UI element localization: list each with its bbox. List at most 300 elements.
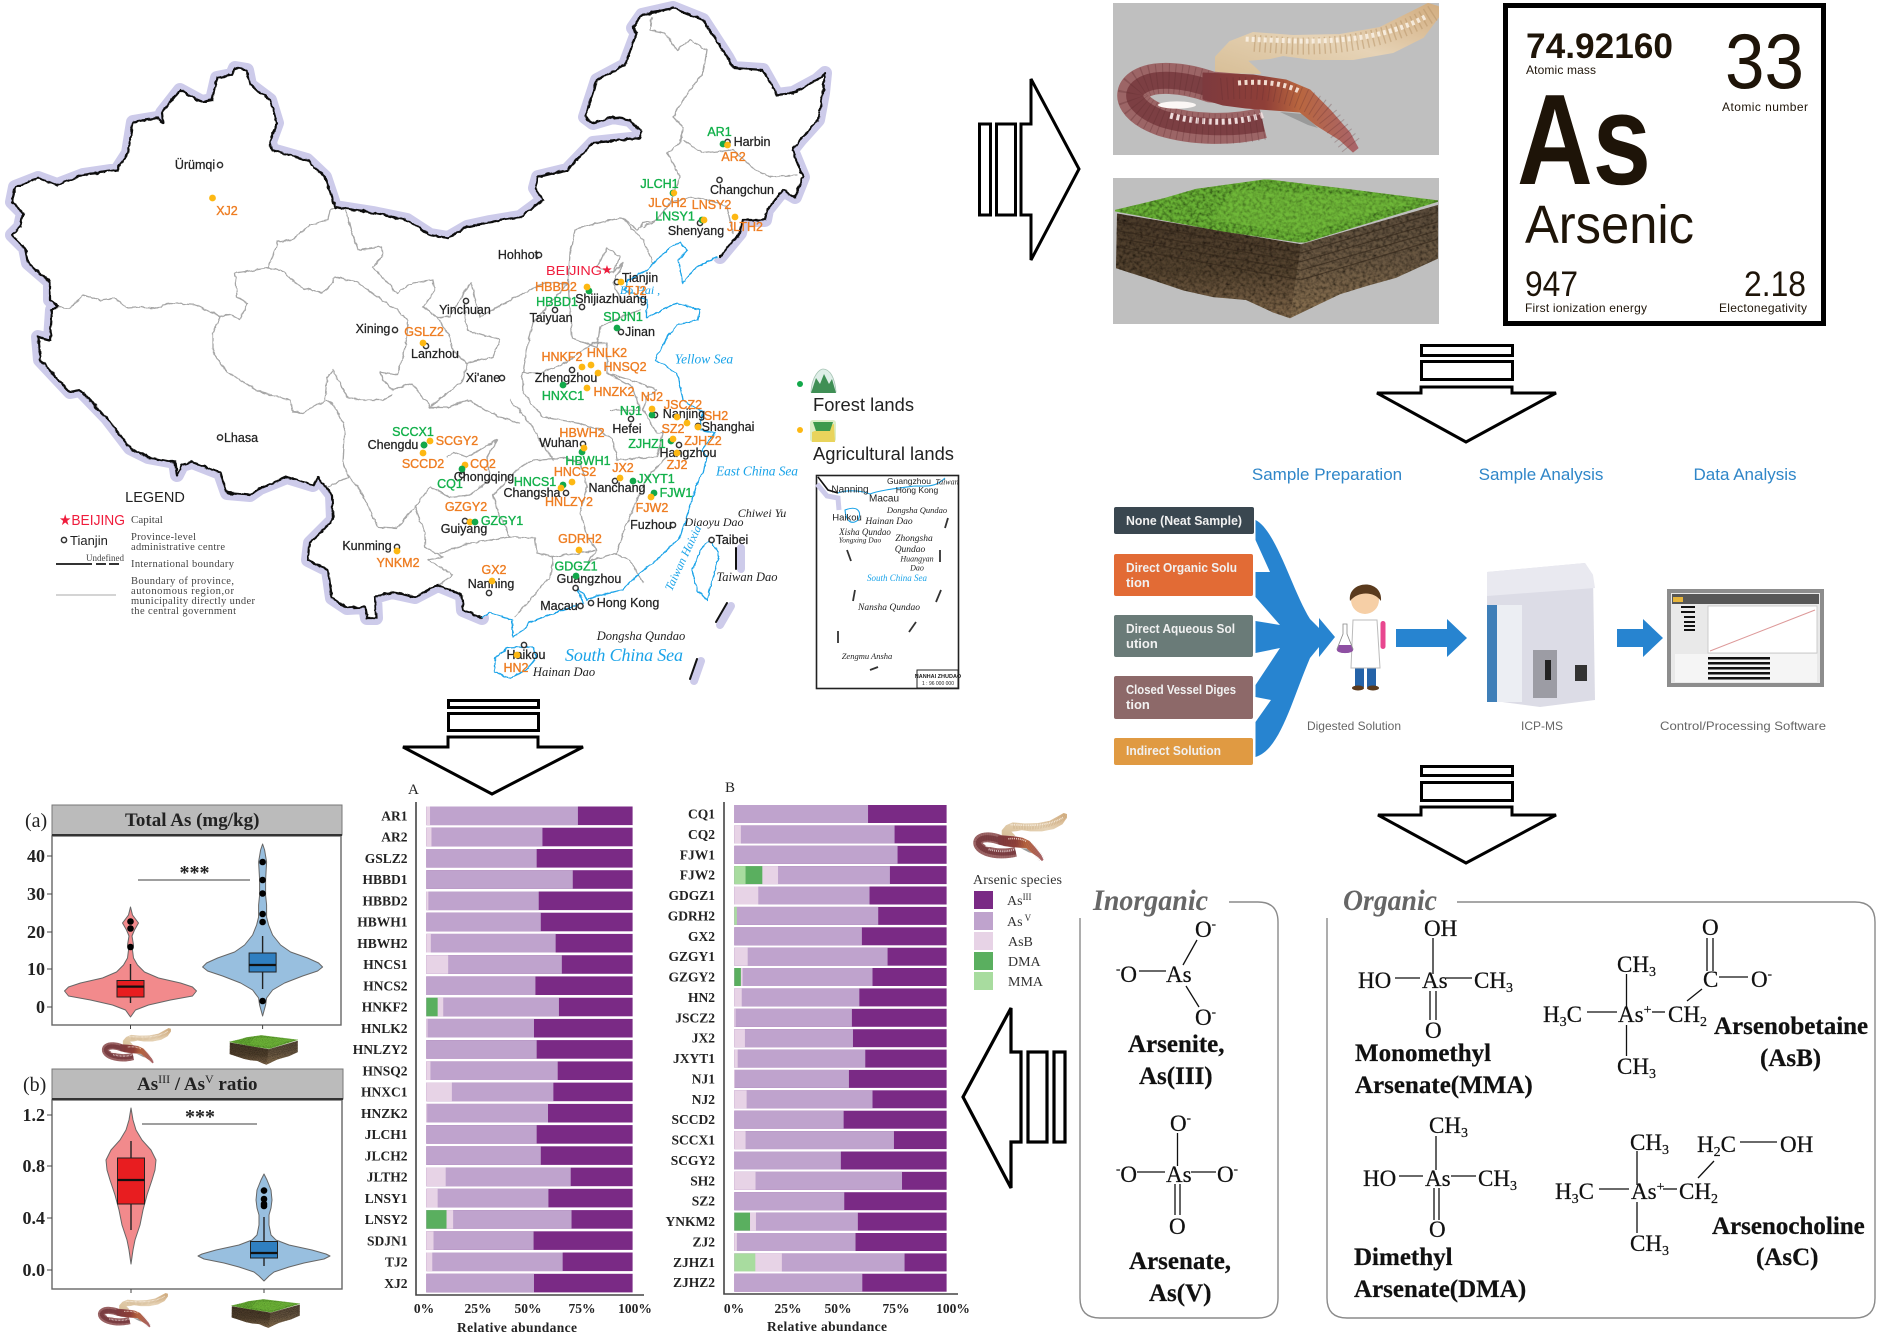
axis labels A — [414, 1301, 652, 1335]
forest lands key: Forest lands — [813, 395, 914, 415]
structure: arsenocholine: 3 — [1662, 1244, 1669, 1259]
sampling site codes: GZGY2 — [445, 500, 487, 514]
structure: arsenocholine: C — [1579, 1179, 1594, 1204]
structure: monomethyl arsenate: Monomethyl — [1355, 1040, 1491, 1067]
axes A — [416, 802, 644, 1295]
structure: arsenocholine: CH — [1679, 1179, 1711, 1204]
inset map of South China Sea: Dao — [909, 564, 924, 572]
structure: arsenobetaine: CH — [1617, 1054, 1649, 1079]
sampling site codes: HNKF2 — [542, 350, 583, 364]
arsenic periodic table card: Electonegativity — [1719, 301, 1807, 315]
row labels B: GZGY1 — [668, 949, 715, 964]
nine-dash line segments — [690, 548, 741, 681]
land type key — [797, 369, 954, 464]
row labels B: ZJHZ1 — [673, 1255, 715, 1270]
violin plot (a): total As: 0 — [36, 997, 45, 1017]
axis labels B — [724, 1301, 970, 1334]
structure: arsenobetaine — [1543, 915, 1868, 1082]
city names: Ürümqi — [175, 158, 215, 172]
city names: BEIJING — [546, 264, 602, 278]
workflow captions: ICP-MS — [1521, 719, 1563, 733]
arsenic periodic table card: Arsenic — [1525, 195, 1694, 255]
structure: dimethyl arsenate: CH — [1478, 1166, 1510, 1191]
soil violin — [198, 1174, 330, 1281]
sampling site codes: YNKM2 — [376, 556, 420, 570]
structure: arsenocholine: As — [1631, 1179, 1657, 1204]
map legend: the central government — [131, 606, 236, 617]
sampling site codes: HN2 — [503, 661, 529, 675]
method: direct organic solution: Direct Organic Solu — [1126, 560, 1237, 575]
sampling site codes: SCCX1 — [392, 425, 434, 439]
row labels A: HNZK2 — [361, 1106, 408, 1121]
significance bracket: *** — [185, 1106, 215, 1128]
row labels B: FJW2 — [680, 868, 715, 883]
forest lands key — [797, 369, 914, 415]
city names: Shanghai — [702, 420, 754, 434]
map legend: Undefined — [86, 553, 124, 563]
bar chart B: B — [725, 780, 735, 796]
axis labels B: 0% — [724, 1301, 744, 1316]
city names: Changsha — [504, 486, 561, 500]
city names: Hefei — [612, 422, 642, 436]
map legend: LEGEND — [125, 490, 185, 506]
arsenic periodic table card: 74.92160 — [1526, 27, 1673, 66]
row labels A: HNXC1 — [361, 1085, 408, 1100]
panel: inorganic arsenic: Inorganic — [1092, 884, 1208, 917]
sampling site codes — [216, 125, 763, 675]
city names: ★ — [601, 263, 613, 277]
structure: arsenite: - — [1212, 916, 1216, 931]
structure: arsenocholine: 2 — [1711, 1192, 1718, 1207]
icon: processing software monitor — [1667, 589, 1824, 687]
row labels B: JX2 — [692, 1031, 715, 1046]
method: direct aqueous solution — [1114, 615, 1253, 657]
arsenic periodic table card: Atomic mass — [1526, 63, 1596, 77]
row labels A: XJ2 — [384, 1276, 408, 1291]
violin plot (b): AsIII/AsV ratio: ratio — [214, 1074, 257, 1095]
sample preparation methods — [1114, 507, 1254, 765]
city names: Lanzhou — [411, 347, 459, 361]
row labels A: AR2 — [381, 830, 408, 845]
inset map of South China Sea: Guangzhou — [887, 476, 931, 486]
city names: Fuzhou — [630, 518, 672, 532]
sampling site codes: FJW1 — [660, 486, 692, 500]
inset map of South China Sea: Dongsha Qundao — [886, 505, 947, 515]
sampling site codes: HBBD1 — [536, 295, 578, 309]
arsenic species legend — [973, 813, 1067, 990]
violin plot (b): AsIII/AsV ratio: / As — [170, 1074, 205, 1095]
structure: arsenite: - — [1212, 1004, 1216, 1019]
sampling site codes: LNSY2 — [692, 198, 731, 212]
sampling site codes: JXYT1 — [637, 472, 675, 486]
structure: arsenate: O — [1169, 1214, 1186, 1239]
sampling site codes: AR1 — [707, 125, 732, 139]
arrow: down to arsenic species structures — [1378, 766, 1556, 863]
inset map of South China Sea: Zhongsha — [895, 534, 933, 544]
row labels B: HN2 — [688, 990, 715, 1005]
row labels A: HNSQ2 — [362, 1063, 408, 1078]
structure: dimethyl arsenate: 3 — [1461, 1126, 1468, 1141]
sampling site codes: SH2 — [704, 409, 728, 423]
method: direct organic solution: tion — [1126, 575, 1150, 590]
city names: Hong Kong — [597, 596, 659, 610]
structure: arsenobetaine: 2 — [1700, 1015, 1707, 1030]
arrow: left to bar charts — [963, 1008, 1065, 1188]
city names: Xi'ane — [466, 371, 500, 385]
sampling site codes: JX2 — [612, 461, 634, 475]
sampling site codes: TJ2 — [626, 284, 646, 298]
structure: arsenocholine: 3 — [1572, 1192, 1579, 1207]
city names: Haikou — [507, 648, 545, 662]
structure: monomethyl arsenate: O — [1425, 1018, 1442, 1043]
row labels A: SDJN1 — [367, 1233, 408, 1248]
violin plot (b): AsIII/AsV ratio: III — [158, 1072, 170, 1086]
inset map of South China Sea: Nansha Qundao — [857, 603, 920, 613]
agricultural lands key: Agricultural lands — [813, 444, 954, 464]
structure: arsenocholine: Arsenocholine — [1712, 1213, 1865, 1240]
city names: Zhengzhou — [535, 371, 597, 385]
violin plot (b): AsIII/AsV ratio: (b) — [23, 1074, 46, 1096]
structure: arsenite: Arsenite, — [1128, 1031, 1224, 1058]
structure: arsenite: As — [1166, 962, 1192, 987]
arrow: down to workflow — [1377, 346, 1556, 442]
structure: arsenocholine: H — [1555, 1179, 1572, 1204]
sea and island names: Hainan Dao — [532, 665, 595, 679]
sampling site codes: GDRH2 — [558, 532, 602, 546]
method: indirect solution — [1114, 738, 1253, 765]
row labels B: SCCD2 — [671, 1112, 715, 1127]
row labels A: JLCH2 — [365, 1148, 408, 1163]
sampling site codes: HNSQ2 — [603, 360, 647, 374]
panel: organic arsenic — [1327, 884, 1875, 1318]
sea and island names: Diaoyu Dao — [684, 515, 744, 529]
row labels A: AR1 — [381, 808, 408, 824]
axis labels A: 0% — [414, 1301, 434, 1316]
structure: monomethyl arsenate — [1355, 916, 1533, 1099]
sea and island names: Chiwei Yu — [738, 506, 786, 520]
structure: arsenocholine: H — [1697, 1132, 1714, 1157]
city names: Taiyuan — [529, 311, 573, 325]
row labels A: HBBD1 — [362, 872, 408, 887]
icon: soil — [231, 1299, 300, 1328]
row labels B: FJW1 — [680, 847, 715, 862]
row labels A: HBWH2 — [357, 936, 408, 951]
inset map of South China Sea: Huangyan — [899, 554, 934, 564]
axis labels A: 25% — [464, 1301, 492, 1316]
structure: dimethyl arsenate: 3 — [1510, 1179, 1517, 1194]
structure: arsenate: O — [1120, 1162, 1137, 1187]
violin plot (a): total As: 10 — [27, 959, 45, 979]
structure: arsenobetaine: As — [1618, 1002, 1644, 1027]
row labels B: JSCZ2 — [675, 1010, 715, 1025]
row labels A: HNLZY2 — [353, 1042, 408, 1057]
method: direct organic solution — [1114, 554, 1253, 596]
city names: Nanjing — [663, 407, 705, 421]
structure: arsenobetaine: 3 — [1560, 1015, 1567, 1030]
arrow: to software — [1617, 619, 1663, 657]
violin plot (a): total As: Total As (mg/kg) — [125, 810, 259, 831]
structure: arsenobetaine: 3 — [1649, 965, 1656, 980]
row labels B: GX2 — [688, 929, 715, 944]
bar chart A — [353, 782, 652, 1335]
arsenic species legend: DMA — [1008, 955, 1042, 970]
sampling site codes: HBWH1 — [565, 454, 611, 468]
violin plot (b): AsIII/AsV ratio — [22, 1069, 343, 1328]
city names: Hohhot — [498, 248, 539, 262]
map legend: administrative centre — [131, 542, 225, 553]
icon: earthworm — [105, 1028, 171, 1063]
structure: arsenite: O — [1195, 1005, 1212, 1030]
structure: arsenate: - — [1234, 1161, 1238, 1176]
arsenic periodic table card — [1506, 6, 1824, 324]
sampling site codes: HNCS1 — [514, 475, 556, 489]
method: closed vessel digestion — [1114, 676, 1253, 719]
row labels B: GDGZ1 — [668, 888, 715, 903]
axis labels B: 25% — [774, 1301, 802, 1316]
structure: arsenobetaine: C — [1567, 1002, 1582, 1027]
structure: monomethyl arsenate: HO — [1358, 968, 1391, 993]
structure: arsenite: O — [1195, 917, 1212, 942]
sampling site codes: HNZK2 — [594, 385, 635, 399]
icon: earthworm — [101, 1293, 168, 1327]
row labels A: HNCS2 — [363, 978, 408, 993]
structure: arsenobetaine: CH — [1617, 952, 1649, 977]
sea and island names: Yellow Sea — [675, 352, 733, 366]
axis labels A: 50% — [514, 1301, 542, 1316]
arsenic periodic table card: Atomic number — [1722, 100, 1808, 114]
violin plot (b): AsIII/AsV ratio: 0.0 — [22, 1260, 45, 1280]
row labels A: JLTH2 — [367, 1170, 408, 1185]
land fill — [12, 8, 825, 637]
structure: arsenocholine: CH — [1630, 1130, 1662, 1155]
city names: Guiyang — [441, 522, 487, 536]
city names: Xining — [356, 322, 390, 336]
structure: arsenate: - — [1116, 1161, 1120, 1176]
structure: arsenocholine: C — [1721, 1132, 1736, 1157]
structure: monomethyl arsenate: Arsenate(MMA) — [1355, 1072, 1533, 1099]
city names: Harbin — [734, 135, 770, 149]
row labels B: YNKM2 — [666, 1214, 715, 1229]
arsenic species legend: As — [1007, 894, 1023, 909]
structure: arsenobetaine: - — [1768, 966, 1772, 981]
icon: earthworm — [978, 813, 1067, 861]
method: closed vessel digestion: Closed Vessel Diges — [1126, 682, 1236, 697]
structure: monomethyl arsenate: 3 — [1506, 981, 1513, 996]
sampling site codes: JLCH2 — [648, 196, 687, 210]
axis labels A: 75% — [568, 1301, 596, 1316]
stacked bars B — [734, 805, 947, 1292]
structure: arsenocholine: 2 — [1714, 1145, 1721, 1160]
inset map of South China Sea: Nanning — [831, 484, 869, 496]
sampling site codes: FJW2 — [636, 501, 668, 515]
inset map of South China Sea: Haikou — [832, 512, 862, 524]
row labels B: GZGY2 — [668, 970, 715, 984]
sampling site codes: GX2 — [481, 563, 507, 577]
row labels A: TJ2 — [385, 1254, 408, 1270]
sampling site codes: JLCH1 — [640, 177, 679, 191]
city dots — [217, 139, 730, 648]
arsenic species legend: III — [1023, 892, 1032, 902]
method: none: None (Neat Sample) — [1126, 513, 1242, 528]
workflow headings: Sample Preparation — [1252, 465, 1402, 484]
sampling site dots — [209, 141, 738, 658]
arsenic species legend: As — [1007, 915, 1023, 930]
earthworm photo — [1113, 3, 1439, 155]
inset map of South China Sea: Hong Kong — [896, 485, 939, 495]
city names: Chengdu — [368, 438, 418, 452]
axis labels B: Relative abundance — [767, 1319, 887, 1334]
row labels B: NJ1 — [692, 1071, 715, 1086]
structure: arsenobetaine: O — [1702, 915, 1719, 940]
sampling site codes: HNCS2 — [554, 465, 596, 479]
significance bracket — [138, 862, 250, 884]
row labels A: HBBD2 — [362, 894, 408, 908]
sea and island names: Taiwan Dao — [716, 570, 778, 584]
violin plot (b): AsIII/AsV ratio: V — [205, 1072, 214, 1086]
structure: arsenobetaine: C — [1703, 967, 1718, 992]
workflow captions — [1307, 719, 1826, 733]
city names: Hangzhou — [660, 446, 717, 460]
map legend: International boundary — [131, 559, 235, 570]
icon: ICP-MS instrument — [1487, 563, 1595, 707]
structure: dimethyl arsenate: CH — [1429, 1113, 1461, 1138]
sea and island names — [532, 283, 798, 679]
coastline — [482, 242, 719, 678]
icon: soil — [229, 1035, 298, 1065]
sampling site codes: JLTH2 — [727, 220, 763, 234]
sampling site codes: ZJHZ2 — [684, 434, 722, 448]
lavender halo along land boundary — [12, 8, 825, 618]
row labels B: SCCX1 — [671, 1133, 715, 1148]
violin plot (b): AsIII/AsV ratio: 1.2 — [22, 1105, 45, 1125]
map legend: Tianjin — [70, 533, 108, 548]
arsenic species legend: V — [1023, 913, 1032, 923]
sampling site codes: SZ2 — [662, 422, 685, 436]
city names: Tianjin — [622, 271, 658, 285]
workflow headings: Data Analysis — [1694, 465, 1796, 484]
sampling site codes: LNSY1 — [655, 210, 695, 224]
violin plot (a): total As: 30 — [27, 884, 45, 904]
city names: Nanning — [468, 577, 514, 591]
sampling site codes: SCGY2 — [436, 434, 478, 448]
sampling site codes: HNLK2 — [587, 346, 627, 360]
inset map of South China Sea: 1 : 96 000 000 — [922, 681, 954, 687]
method: direct aqueous solution: Direct Aqueous Sol — [1126, 621, 1235, 636]
bar chart A: A — [408, 782, 419, 798]
row labels B: SH2 — [690, 1173, 715, 1188]
international boundary — [12, 8, 825, 618]
method: direct aqueous solution: ution — [1126, 636, 1158, 651]
city names: Wuhan — [539, 436, 579, 450]
row labels B: SCGY2 — [671, 1153, 715, 1168]
city names: Macau — [540, 599, 578, 613]
map legend: autonomous region,or — [131, 586, 234, 597]
row labels B: ZJHZ2 — [673, 1275, 715, 1290]
arsenic periodic table card: 2.18 — [1744, 265, 1806, 304]
inset map of South China Sea: South China Sea — [867, 573, 927, 583]
row labels B: NJ2 — [692, 1092, 715, 1107]
sampling site codes: JSCZ2 — [664, 398, 702, 412]
sampling site codes: HBWH2 — [559, 426, 605, 440]
arrow: map to earthworm and soil — [980, 79, 1079, 260]
sea and island names: Taiwan Haixia — [662, 523, 704, 593]
violin plot (b): AsIII/AsV ratio: 0.4 — [22, 1208, 45, 1228]
inset map of South China Sea: Taiwan — [935, 478, 959, 486]
map legend: Boundary of province, — [131, 576, 234, 587]
structure: arsenite: O — [1120, 962, 1137, 987]
inset map of South China Sea: Macau — [869, 494, 899, 504]
city names: Kunming — [342, 539, 392, 553]
sampling site codes: HNXC1 — [542, 389, 584, 403]
map legend: Province-level — [131, 532, 196, 543]
structure: arsenite — [1116, 916, 1224, 1090]
structure: dimethyl arsenate: O — [1429, 1217, 1446, 1242]
funnel arrow into digested solution — [1256, 520, 1335, 757]
sampling site codes: GDGZ1 — [554, 560, 598, 574]
sampling site codes: HNLZY2 — [545, 495, 593, 509]
map legend: Capital — [131, 514, 163, 526]
structure: arsenate: O — [1217, 1162, 1234, 1187]
method: none — [1114, 507, 1254, 534]
row labels A: HBWH1 — [357, 915, 408, 930]
workflow headings — [1252, 465, 1796, 484]
city names: Changchun — [710, 183, 774, 197]
structure: arsenate: O — [1170, 1111, 1187, 1136]
row labels B — [666, 806, 715, 1290]
significance bracket: *** — [180, 862, 210, 884]
structure: monomethyl arsenate: OH — [1424, 916, 1457, 941]
stacked bars A — [426, 806, 633, 1292]
arsenic periodic table card: 947 — [1525, 265, 1578, 304]
arrow: map down to violin and bar charts — [403, 700, 583, 794]
sea and island names: Dongsha Qundao — [596, 629, 685, 643]
city names: Chongqing — [454, 470, 514, 484]
city names: Nanchang — [588, 481, 646, 495]
arsenic species legend: Arsenic species — [973, 873, 1062, 888]
structure: arsenate: As(V) — [1149, 1280, 1212, 1307]
map of China — [12, 8, 825, 681]
sampling site codes: GSLZ2 — [404, 325, 444, 339]
structure: arsenocholine: 3 — [1662, 1143, 1669, 1158]
structure: dimethyl arsenate: Arsenate(DMA) — [1354, 1276, 1526, 1303]
panel: organic arsenic: Organic — [1343, 884, 1437, 917]
inset map of South China Sea: Xisha Qundao — [838, 527, 891, 537]
row labels B: ZJ2 — [692, 1234, 715, 1250]
city names — [175, 135, 774, 662]
axes B — [724, 802, 958, 1294]
structure: arsenocholine — [1555, 1130, 1865, 1271]
axis labels A: Relative abundance — [457, 1320, 577, 1335]
row labels A: HNCS1 — [363, 957, 408, 972]
violin plot (a): total As: 40 — [27, 846, 45, 866]
sampling site codes: NJ2 — [641, 390, 663, 404]
structure: arsenobetaine: 3 — [1649, 1067, 1656, 1082]
row labels A: LNSY2 — [365, 1212, 408, 1227]
city names: Yinchuan — [439, 303, 491, 317]
structure: monomethyl arsenate: As — [1422, 968, 1448, 993]
structure: arsenate: - — [1187, 1110, 1191, 1125]
sea and island names: East China Sea — [715, 464, 798, 478]
inset map of South China Sea: Qundao — [895, 545, 926, 555]
map legend: municipality directly under — [131, 596, 256, 607]
structure: arsenocholine: + — [1657, 1180, 1665, 1195]
sampling site codes: AR2 — [721, 150, 746, 164]
city names: Taibei — [716, 533, 748, 547]
structure: arsenobetaine: Arsenobetaine — [1714, 1013, 1868, 1040]
inset map of South China Sea — [816, 476, 962, 688]
row labels A: HNLK2 — [361, 1021, 408, 1036]
violin plot (a): total As: (a) — [25, 810, 47, 832]
